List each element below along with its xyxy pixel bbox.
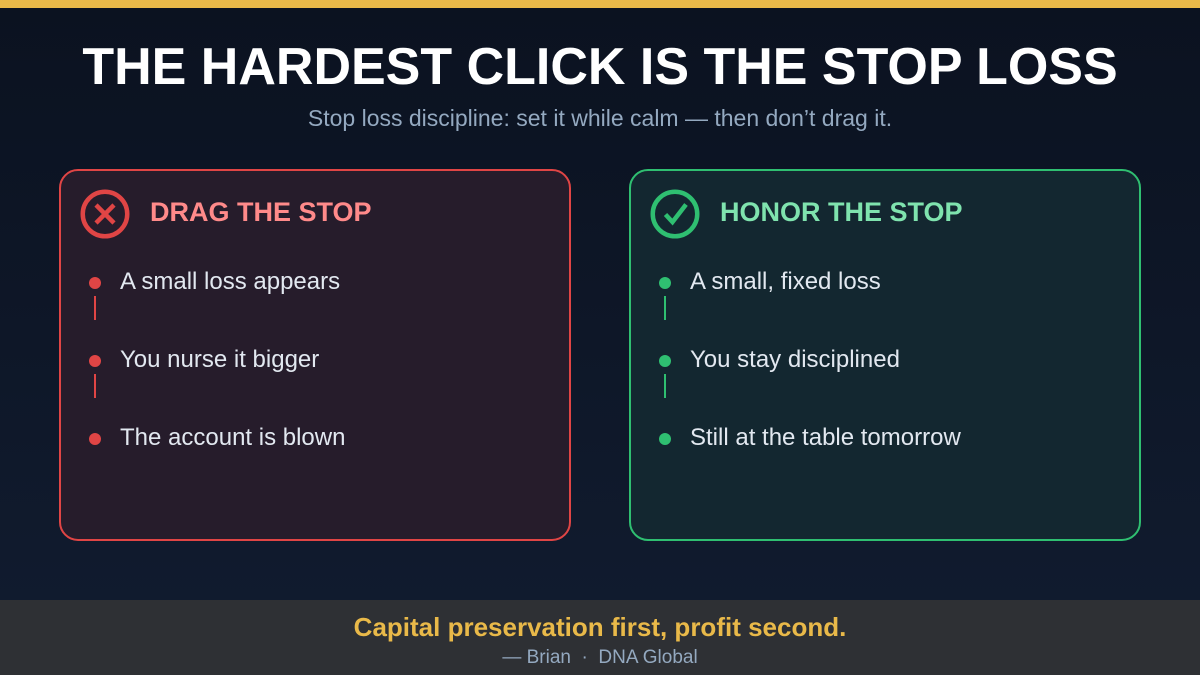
connector 2	[94, 374, 96, 398]
step 2: You stay disciplined	[690, 346, 900, 373]
step 2 dot	[659, 355, 671, 367]
step 1 dot	[89, 277, 101, 289]
panel: honor the stop	[629, 169, 1141, 541]
connector 1	[94, 296, 96, 320]
panel: drag the stop	[59, 169, 571, 541]
icon: green check in circle	[650, 190, 700, 238]
heading: honor the stop: HONOR THE STOP	[720, 197, 963, 227]
step 3 dot	[659, 433, 671, 445]
step 1: A small loss appears	[120, 268, 340, 295]
top accent bar	[0, 0, 1200, 8]
step 2 dot	[89, 355, 101, 367]
connector 1	[664, 296, 666, 320]
step 3: The account is blown	[120, 424, 345, 451]
icon: red cross in circle	[80, 190, 130, 238]
step 1: A small, fixed loss	[690, 268, 881, 295]
step 3: Still at the table tomorrow	[690, 424, 961, 451]
footer attribution: — Brian · DNA Global	[502, 647, 698, 668]
heading: drag the stop: DRAG THE STOP	[150, 197, 372, 227]
footer band	[0, 600, 1200, 675]
step 2: You nurse it bigger	[120, 346, 319, 373]
subtitle: Stop loss discipline: set it while calm — then don’t drag it.	[308, 105, 892, 131]
footer quote: Capital preservation first, profit second.	[354, 612, 846, 642]
title: THE HARDEST CLICK IS THE STOP LOSS	[82, 38, 1118, 96]
step 3 dot	[89, 433, 101, 445]
step 1 dot	[659, 277, 671, 289]
connector 2	[664, 374, 666, 398]
